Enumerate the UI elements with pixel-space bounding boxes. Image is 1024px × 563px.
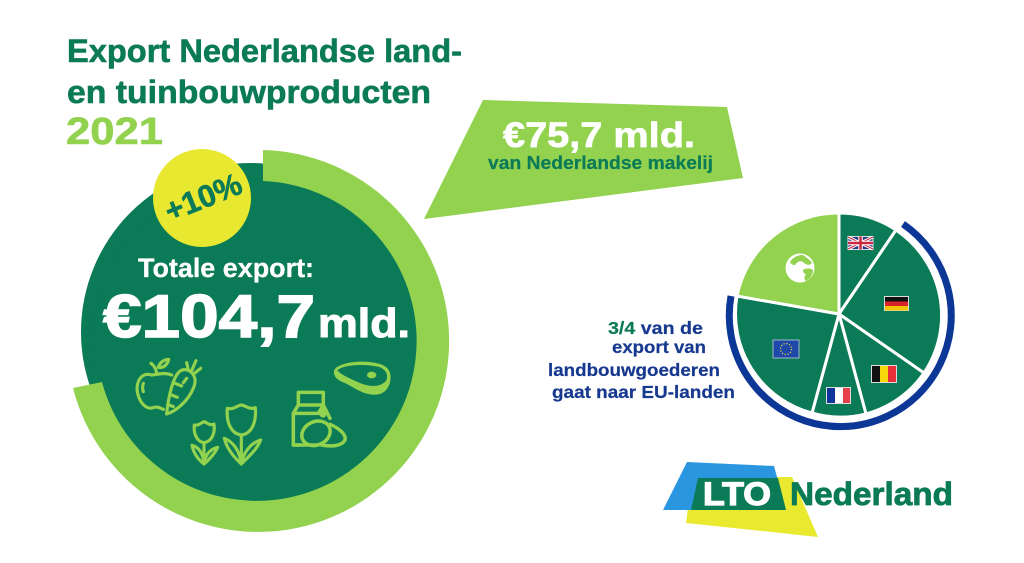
icon: milk carton and egg xyxy=(293,392,345,450)
callout: Dutch-made value: van Nederlandse makelij xyxy=(488,153,713,173)
icon: globe xyxy=(786,254,814,282)
callout: Dutch-made value xyxy=(424,100,743,219)
badge: +10% xyxy=(153,149,251,247)
title: en tuinbouwproducten xyxy=(67,74,431,110)
logo yellow shape xyxy=(686,477,818,537)
growth ring xyxy=(73,150,449,532)
title: Export Nederlandse land- xyxy=(67,33,462,69)
icon: large tulip xyxy=(224,405,261,464)
total export value xyxy=(103,283,410,350)
slice: United Kingdom xyxy=(839,213,896,314)
logo: LTO Nederland xyxy=(663,462,953,537)
flag: France xyxy=(826,387,851,404)
slice: France xyxy=(812,314,866,417)
EU share note: gaat naar EU-landen xyxy=(552,382,735,402)
total export label: Totale export: xyxy=(138,253,314,283)
logo blue shape xyxy=(663,462,786,510)
flag: Germany xyxy=(884,296,909,311)
main circle: total export xyxy=(81,163,423,506)
icon: apple xyxy=(137,359,172,409)
badge: +10%: +10% xyxy=(159,166,247,229)
pie chart: export destinations xyxy=(736,213,942,417)
slice: rest of world xyxy=(737,213,839,314)
flag: European Union xyxy=(773,340,799,358)
slice: other EU xyxy=(736,296,839,413)
title xyxy=(66,33,462,153)
logo dark band xyxy=(691,478,786,510)
icon: carrot xyxy=(167,361,201,414)
EU share note: export van xyxy=(612,337,706,357)
total export value: €104,7 xyxy=(103,283,315,350)
title year: 2021 xyxy=(66,111,163,153)
icon: steak xyxy=(334,362,391,395)
slice: Germany xyxy=(839,230,942,373)
flag: Belgium xyxy=(871,365,897,383)
EU arc xyxy=(729,224,951,427)
logo LTO text: LTO xyxy=(703,476,771,512)
EU share note: 3/4 van de xyxy=(608,318,703,338)
icon: small tulip xyxy=(192,422,218,464)
callout: Dutch-made value: €75,7 mld. xyxy=(503,116,695,155)
slice: Belgium xyxy=(839,314,924,414)
total export value: mld. xyxy=(318,300,410,346)
product icons xyxy=(137,359,261,464)
EU share note xyxy=(548,318,735,402)
flag: United Kingdom xyxy=(848,236,873,250)
logo Nederland text: Nederland xyxy=(790,476,953,512)
EU share note: landbouwgoederen xyxy=(548,360,720,380)
